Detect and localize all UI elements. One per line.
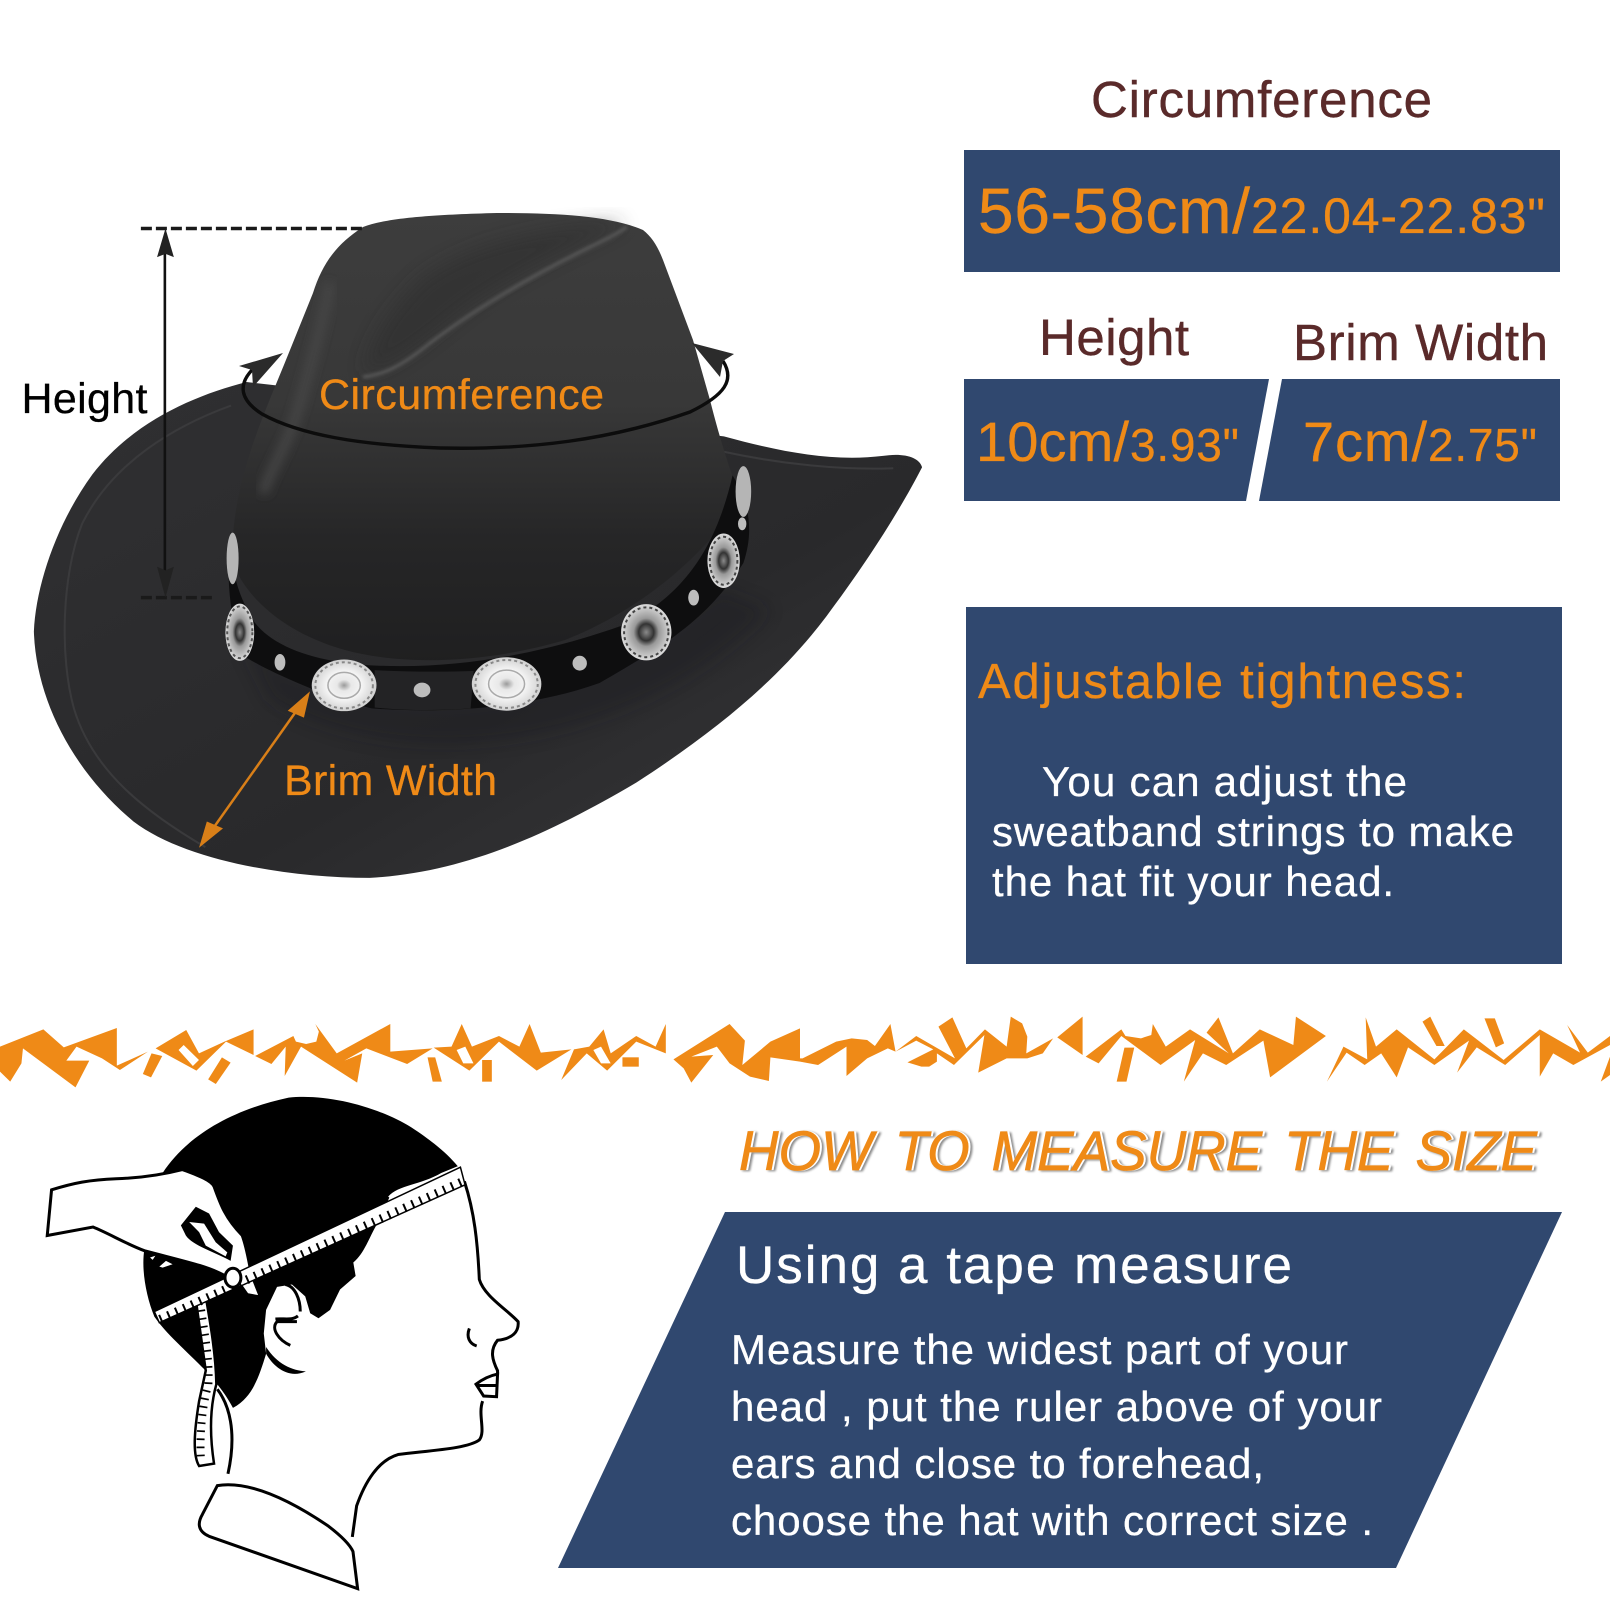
panel: height spec: [964, 309, 1269, 501]
hat band and conchos: [225, 466, 751, 711]
panel body text: sweatband strings to make: [992, 808, 1514, 855]
concho: far right: [707, 534, 740, 588]
value inches: 22.04-22.83": [1251, 188, 1545, 244]
band shadow on brim: [240, 590, 770, 744]
crown ridge highlight: [363, 227, 627, 377]
panel heading: Using a tape measure: [736, 1236, 1292, 1295]
hat photo: [34, 213, 922, 878]
value box: [964, 150, 1560, 272]
value box: [1259, 379, 1560, 501]
panel: hat with measurement annotations: [22, 213, 922, 878]
heading: brim width: Brim Width: [1293, 314, 1548, 371]
panel body text: [731, 1326, 1382, 1544]
section title: HOW TO MEASURE THE SIZE: [739, 1119, 1538, 1182]
parallelogram panel: [558, 1212, 1562, 1568]
heading: circumference: Circumference: [1091, 71, 1432, 128]
panel body text: [992, 758, 1514, 905]
collar: [199, 1485, 358, 1589]
thumb on tape: [225, 1268, 241, 1287]
panel: circumference spec: [964, 71, 1560, 272]
label: brim width: Brim Width: [284, 757, 497, 805]
crown left fold: [263, 283, 330, 493]
panel heading: Adjustable tightness:: [978, 655, 1466, 709]
band highlight: [375, 670, 474, 710]
height dimension arrow: [141, 228, 363, 598]
panel body text: You can adjust the: [1042, 758, 1407, 805]
value inches: 3.93": [1130, 419, 1239, 471]
value inches: 2.75": [1428, 419, 1537, 471]
illustration: head with tape measure: [47, 1097, 518, 1589]
crown: [232, 213, 741, 660]
panel: how to measure: [558, 1119, 1562, 1568]
crown crease shadow: [365, 222, 627, 372]
hanging tape: [195, 1287, 216, 1466]
finger detail: [181, 1207, 233, 1261]
concho: left side: [225, 604, 254, 661]
label: height: Height: [22, 375, 148, 423]
concho: front left: [312, 659, 376, 711]
hand: [47, 1170, 260, 1297]
panel body text: ears and close to forehead,: [731, 1440, 1264, 1487]
hat brim: [34, 382, 922, 878]
value box: [964, 379, 1269, 501]
decorative orange torn band: [0, 1017, 1610, 1087]
value cm: 10cm/: [976, 410, 1129, 473]
hair: [143, 1097, 458, 1408]
brim stitching: [65, 406, 893, 847]
panel body text: choose the hat with correct size .: [731, 1497, 1373, 1544]
panel body text: head , put the ruler above of your: [731, 1383, 1382, 1430]
ear shadow: [266, 1347, 306, 1374]
main tape: [154, 1167, 465, 1323]
brim width arrow: [199, 691, 310, 848]
face outline: [217, 1181, 518, 1537]
band studs: [275, 517, 746, 697]
heading: height: Height: [1039, 309, 1189, 366]
value cm: 56-58cm/: [978, 175, 1250, 247]
value cm: 7cm/: [1303, 410, 1427, 473]
circumference ring arrow: [239, 343, 734, 448]
concho: right: [621, 604, 671, 660]
label: circumference: Circumference: [319, 371, 604, 419]
panel background: [966, 607, 1562, 964]
panel: brim width spec: [1259, 314, 1560, 501]
concho: back right and back left: [227, 466, 751, 584]
hat band: [228, 475, 749, 710]
panel body text: Measure the widest part of your: [731, 1326, 1348, 1373]
panel body text: the hat fit your head.: [992, 858, 1394, 905]
hair highlight near forehead: [388, 1166, 458, 1202]
finger highlight: [189, 1222, 227, 1256]
hair specks under hand: [150, 1256, 173, 1268]
concho: front right: [472, 657, 541, 711]
panel: adjustable tightness: [966, 607, 1562, 964]
